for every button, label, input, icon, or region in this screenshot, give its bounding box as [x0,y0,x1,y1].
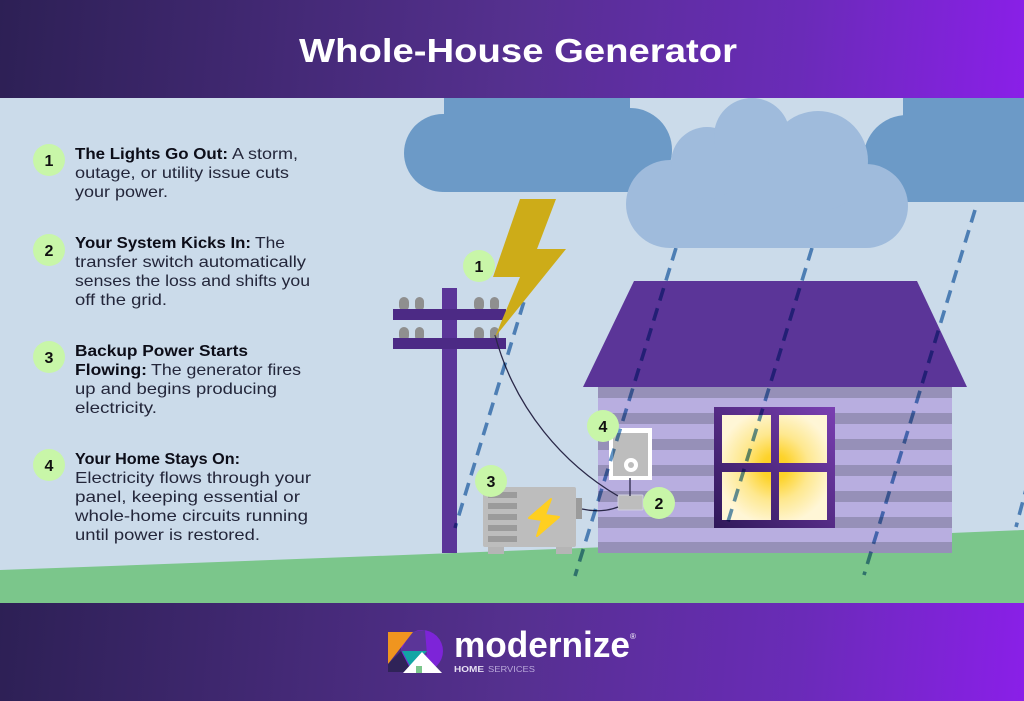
header band [0,0,1024,98]
step 3: electricity. [75,400,157,417]
scene badge 4 [587,410,619,442]
step 2: off the grid. [75,292,167,309]
step 3: Flowing: [75,362,147,379]
generator [483,487,582,554]
scene badge 3: 3 [487,474,496,491]
cloud: light center [626,98,908,248]
step 1: outage, or utility issue cuts [75,165,289,182]
step 3: up and begins producing [75,381,277,398]
logo tagline: HOME [454,665,485,674]
logo registered mark: ® [630,632,636,641]
logo [388,624,636,674]
transfer switch [618,495,643,510]
step 2 [33,234,310,309]
step 4: Electricity flows through your [75,470,312,487]
house wall siding [598,387,952,553]
logo tagline [454,665,535,674]
logo wordmark: modernize [454,624,630,665]
scene badge 4: 4 [599,419,608,436]
footer band [0,603,1024,701]
title: Whole-House Generator [299,32,737,69]
scene badge 1: 1 [475,259,484,276]
step 3: Backup Power Starts [75,343,248,360]
rain [455,210,1024,576]
scene badge 3 [475,465,507,497]
step 4: panel, keeping essential or [75,489,301,506]
step 2: The [255,235,285,252]
utility pole [393,288,506,553]
cloud: dark left [404,98,672,192]
step 1: your power. [75,184,168,201]
step 2: senses the loss and shifts you [75,273,310,290]
step 4: whole-home circuits running [74,508,308,525]
roof [583,281,967,387]
scene badge 2 [643,487,675,519]
scene badge 2: 2 [655,496,664,513]
icon: generator bolt [529,499,559,536]
step 4 [33,449,312,544]
step 1 [33,144,298,201]
step 2: 2 [45,243,54,260]
window [714,407,835,528]
step 4: until power is restored. [75,527,260,544]
step 4: Your Home Stays On: [75,451,240,468]
step 1: A storm, [232,146,298,163]
wiring [495,335,630,511]
step 3: 3 [45,350,54,367]
step 1: The Lights Go Out: [75,146,228,163]
step 3 [33,341,301,417]
logo icon [388,630,443,673]
logo tagline: SERVICES [488,665,535,674]
house [583,281,967,553]
cloud: dark right [864,98,1024,202]
step 1: 1 [45,153,54,170]
ground [0,530,1024,603]
scene badge 1 [463,250,495,282]
step 4: 4 [45,458,54,475]
step 2: transfer switch automatically [75,254,306,271]
step 3: The generator fires [151,362,301,379]
electrical panel [609,428,652,480]
sky background [0,98,1024,603]
step 2: Your System Kicks In: [75,235,251,252]
icon: lightning bolt [493,199,566,337]
